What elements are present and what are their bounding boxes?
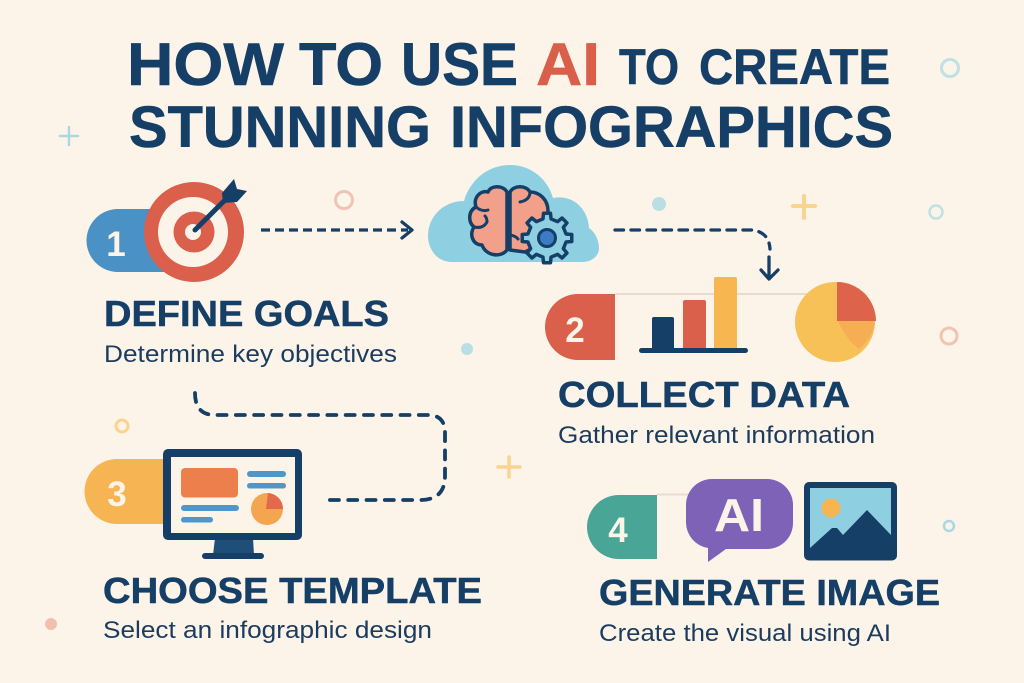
step 3 description: Select an infographic design	[103, 617, 432, 644]
icon: target with arrow	[144, 179, 247, 282]
icon: AI speech bubble	[686, 479, 793, 562]
step 4 description: Create the visual using AI	[599, 620, 891, 647]
step 2 heading: COLLECT DATA	[558, 374, 850, 415]
step 2 number pill: 2	[565, 311, 585, 350]
step 4 number pill: 4	[608, 511, 628, 550]
icon: pie chart	[795, 282, 876, 362]
step 4 heading: GENERATE IMAGE	[599, 572, 940, 613]
step 2 description: Gather relevant information	[558, 422, 875, 449]
title: CREATE	[699, 39, 890, 95]
title: USE	[401, 31, 518, 98]
title: TO	[619, 39, 679, 95]
title: TO	[299, 31, 383, 98]
icon: bar chart	[639, 277, 748, 353]
connector line: step 4	[657, 494, 700, 496]
step 3 heading: CHOOSE TEMPLATE	[103, 570, 482, 611]
step 1 heading: DEFINE GOALS	[104, 293, 389, 334]
step 3 number pill	[84, 459, 170, 524]
step 3 number pill: 3	[107, 475, 127, 514]
step 1 number pill	[87, 209, 175, 272]
icon: AI speech bubble: AI	[714, 489, 764, 541]
step 1 description: Determine key objectives	[104, 341, 397, 368]
icon: monitor with template	[163, 449, 302, 559]
icon: image placeholder	[804, 482, 897, 560]
title	[127, 31, 893, 160]
step 4 number pill	[587, 495, 657, 559]
title: AI	[536, 31, 600, 98]
arrow: cloud to step 2	[615, 230, 778, 279]
arrow: step 1 to step 3 (dashed connector)	[195, 393, 445, 500]
decorative accents	[45, 60, 958, 630]
arrow: step 1 to cloud	[261, 222, 412, 238]
title: STUNNING	[129, 95, 431, 160]
step 2 number pill	[545, 294, 615, 360]
title: HOW	[127, 31, 284, 98]
connector line: step 2	[615, 293, 807, 295]
title: INFOGRAPHICS	[450, 95, 893, 160]
icon: cloud with brain and gear	[428, 165, 599, 263]
step 1 number pill: 1	[106, 225, 126, 264]
